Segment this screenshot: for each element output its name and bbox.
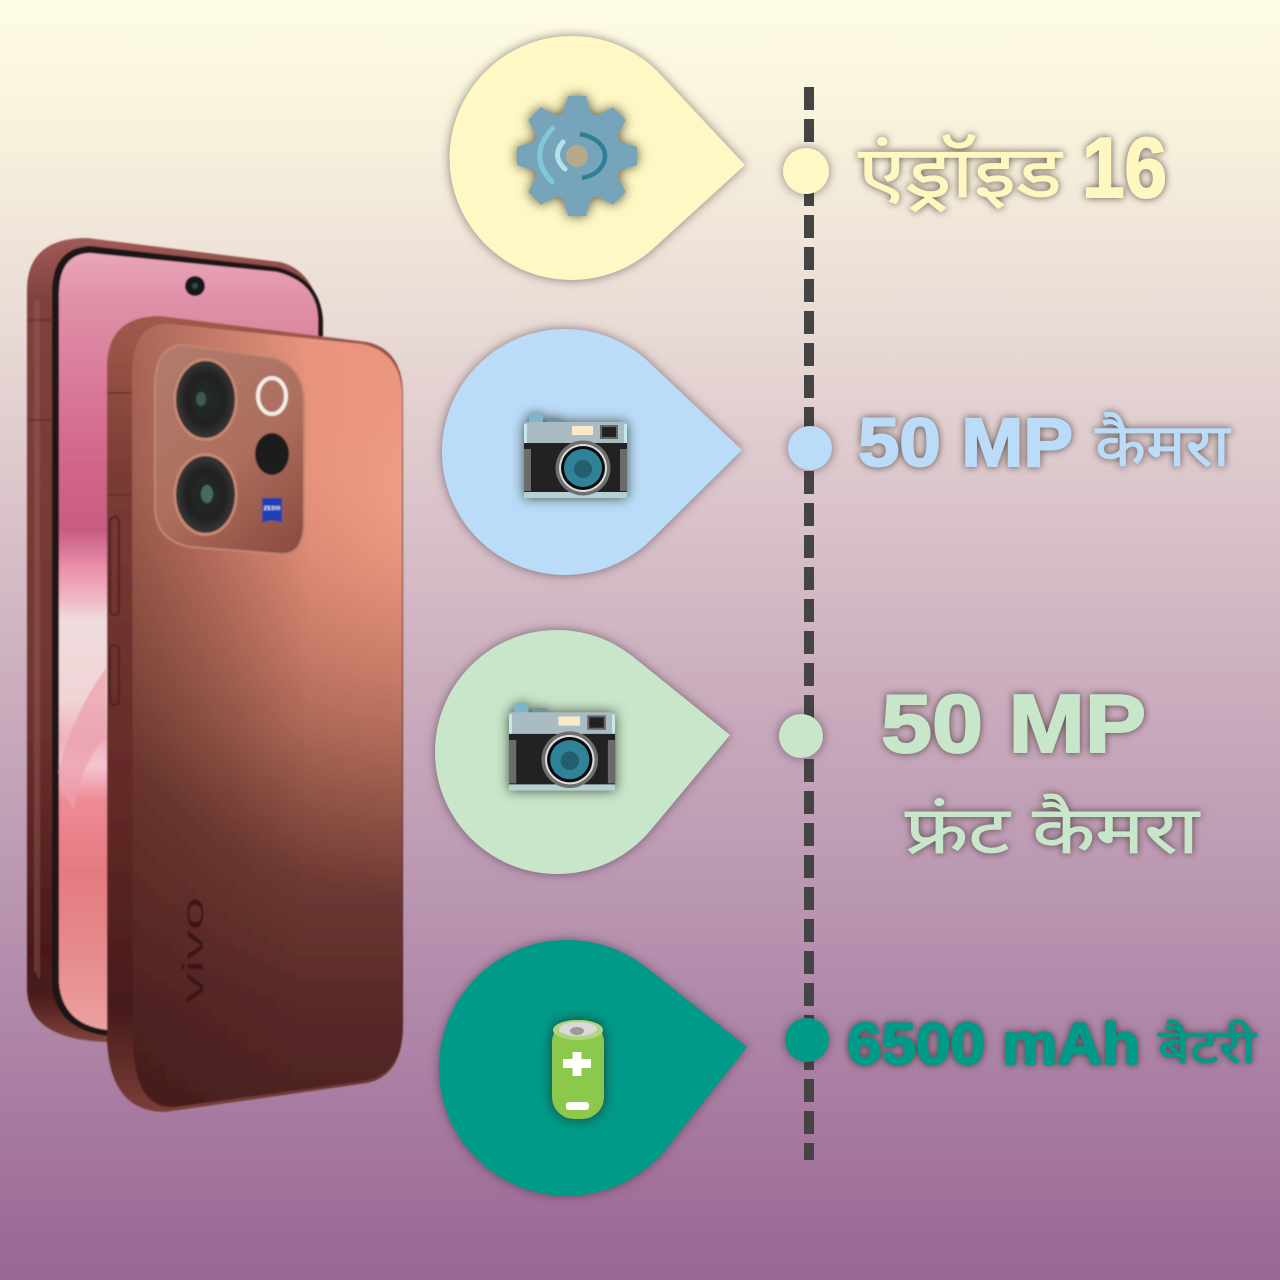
phone illustration	[27, 238, 403, 1112]
item 1: android	[450, 36, 1167, 280]
pin shape 2	[442, 329, 742, 575]
timeline dot 1	[783, 148, 829, 194]
label: front camera: फ्रंट कैमरा	[905, 793, 1201, 867]
timeline dashed line	[804, 87, 814, 1160]
timeline dot 2	[788, 426, 832, 470]
small lens	[255, 433, 289, 475]
phone: rear body	[107, 316, 403, 1112]
icon: battery	[552, 1020, 604, 1119]
label: 6500 mAh: 6500 mAh	[847, 1012, 1140, 1077]
pin shape 3	[435, 630, 730, 874]
label: battery: बैटरी	[1158, 1019, 1258, 1074]
label: 16: 16	[1082, 121, 1167, 216]
pin shape 1	[450, 36, 745, 280]
camera island	[155, 345, 304, 554]
main lens	[174, 358, 238, 441]
phone: front body	[27, 238, 323, 1042]
item 2: camera	[442, 329, 1232, 575]
item 3: front camera	[435, 630, 1201, 874]
zeiss badge	[262, 498, 282, 523]
label: camera: कैमरा	[1095, 412, 1232, 479]
timeline dot 4	[785, 1018, 829, 1062]
flash ring	[258, 378, 286, 414]
icon: camera	[524, 414, 627, 498]
icon: camera front	[509, 704, 615, 791]
label: 50 MP: 50 MP	[858, 404, 1073, 481]
vivo logo: vivo	[177, 897, 210, 1003]
timeline dot 3	[779, 714, 823, 758]
second lens	[174, 453, 238, 536]
zeiss badge: ZEISS	[263, 506, 281, 512]
label: android: एंड्रॉइड	[858, 133, 1064, 213]
item 4: battery	[439, 940, 1258, 1196]
pin shape 4	[439, 940, 747, 1196]
screen wallpaper swoosh	[58, 668, 106, 810]
label: 50 MP: 50 MP	[881, 677, 1146, 770]
side buttons	[110, 517, 119, 705]
icon: gear	[517, 96, 637, 216]
